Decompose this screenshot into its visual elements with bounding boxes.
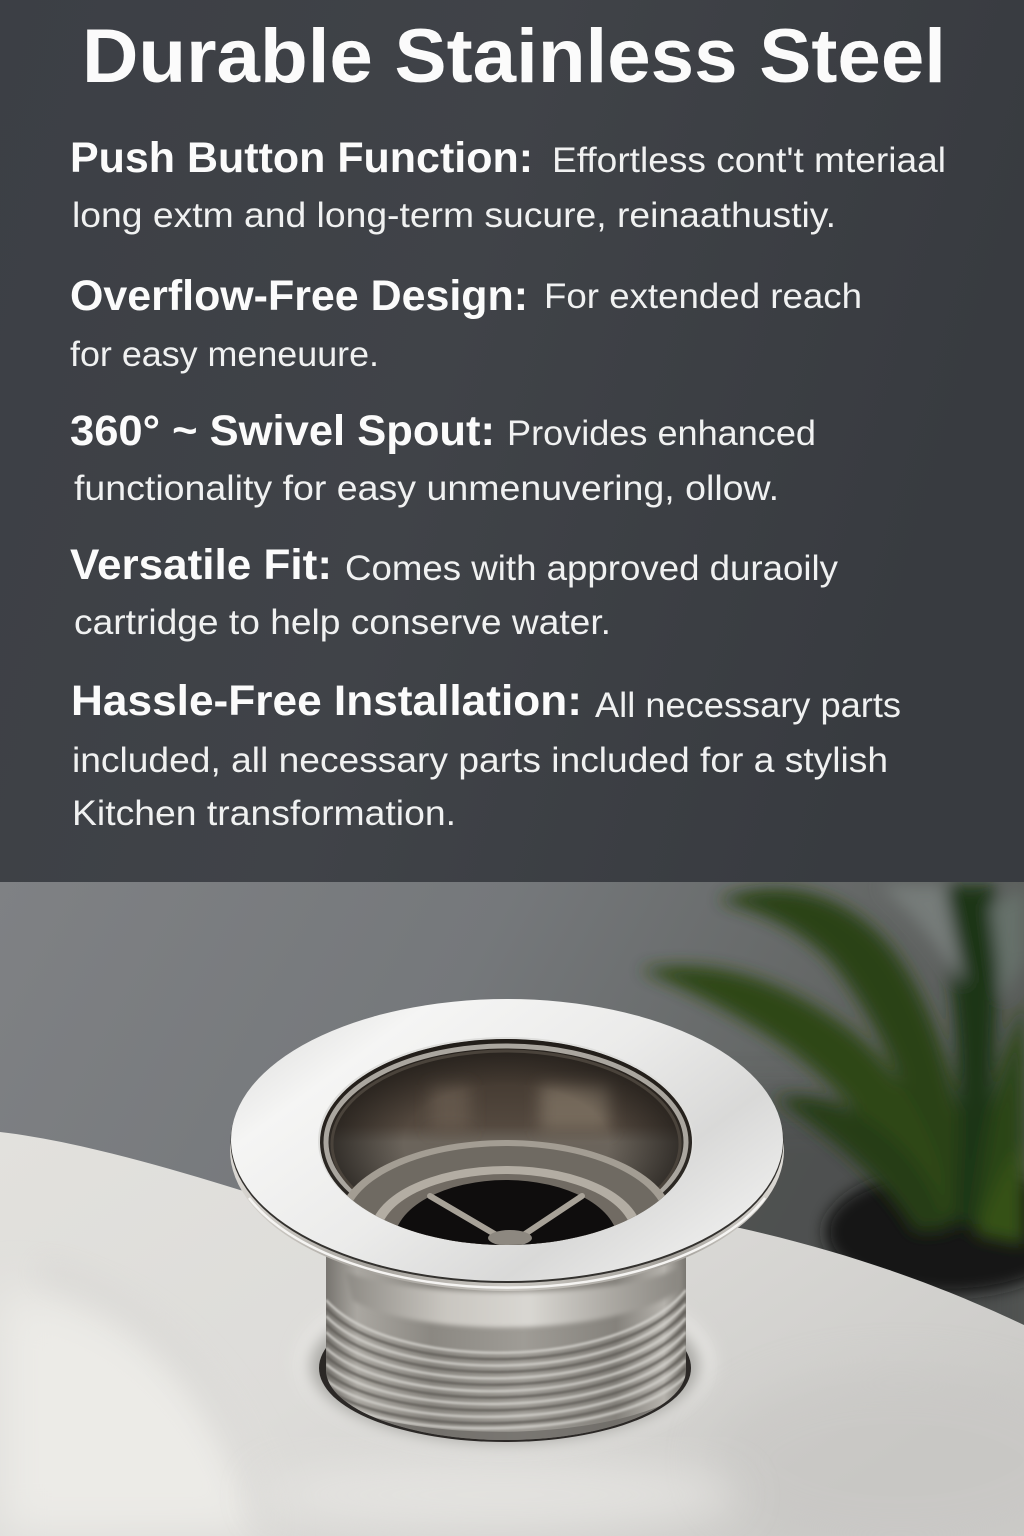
icon: blurred plant — [640, 885, 1024, 1294]
plant pot shadow — [825, 1170, 1024, 1294]
feature description line 2: long extm and long-term sucure, reinaathustiy. — [72, 196, 836, 235]
feature heading: Versatile Fit: — [70, 541, 332, 589]
smooth collar band — [345, 1268, 680, 1327]
flange rim edge — [230, 1120, 784, 1291]
inner wall highlights — [430, 1085, 610, 1131]
feature description line 1: Provides enhanced — [507, 414, 816, 453]
feature description line 1: For extended reach — [544, 277, 862, 316]
drain opening — [318, 1037, 692, 1245]
feature: hassle-free installation — [71, 677, 901, 833]
title: Durable Stainless Steel — [82, 14, 946, 99]
feature description line 2: for easy meneuure. — [70, 335, 379, 374]
feature description line 1: Comes with approved duraoily — [345, 549, 839, 588]
white basin — [0, 1132, 1024, 1536]
feature heading: Overflow-Free Design: — [70, 272, 528, 320]
feature description line 1: All necessary parts — [595, 686, 901, 725]
strainer hub — [488, 1230, 532, 1246]
feature: versatile fit — [70, 541, 839, 642]
feature: 360 swivel spout — [70, 407, 816, 508]
feature heading: 360° ~ Swivel Spout: — [70, 407, 495, 455]
dark drain void — [398, 1180, 614, 1245]
basin soft shading — [0, 1270, 1024, 1536]
inner lip — [318, 1037, 648, 1216]
inner ledge ring — [347, 1140, 665, 1216]
feature description line 1: Effortless cont't mteriaal — [552, 141, 946, 180]
upper lip highlight — [324, 1044, 688, 1193]
photo: sink drain on basin — [0, 882, 1024, 1536]
drain recess in basin — [306, 1320, 714, 1449]
background wall — [0, 882, 1024, 1325]
feature description line 2: cartridge to help conserve water. — [74, 603, 611, 642]
threaded drain body — [326, 1256, 686, 1440]
feature: overflow-free design — [70, 272, 862, 374]
feature heading: Hassle-Free Installation: — [71, 677, 582, 725]
feature: push button function — [70, 134, 946, 235]
polished flange ring — [231, 999, 783, 1281]
panel: dark features background — [0, 0, 1024, 882]
feature description line 3: Kitchen transformation. — [72, 794, 456, 833]
strainer spokes — [430, 1196, 582, 1236]
feature heading: Push Button Function: — [70, 134, 533, 182]
feature description line 2: included, all necessary parts included for a stylish — [72, 741, 888, 780]
side vignette — [320, 1039, 692, 1201]
wall shadow near basin — [738, 1092, 1011, 1318]
feature description line 2: functionality for easy unmenuvering, ollow. — [74, 469, 779, 508]
